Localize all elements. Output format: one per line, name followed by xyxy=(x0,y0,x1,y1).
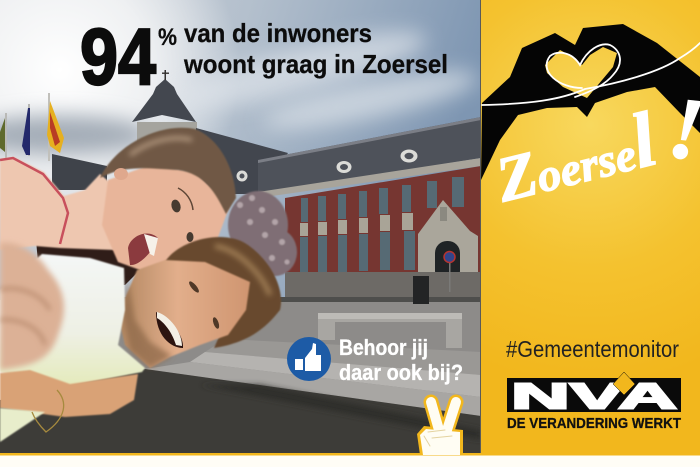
icon: heart-shaped hands xyxy=(481,24,700,180)
bottom white strip xyxy=(0,456,700,467)
photo background: sky xyxy=(0,0,481,300)
logo: N-VA xyxy=(507,372,681,432)
title: statement: woont graag in Zoersel xyxy=(183,49,448,79)
windows xyxy=(300,177,464,272)
script lettering: Zoersel: Zoersel xyxy=(485,95,665,219)
text: call to action: daar ook bij? xyxy=(339,360,463,385)
logo: N-VA: DE VERANDERING WERKT xyxy=(507,415,681,432)
bin xyxy=(413,276,429,304)
hashtag: #Gemeentemonitor xyxy=(506,336,679,362)
title: statement: van de inwoners xyxy=(184,18,372,48)
man: shirt xyxy=(0,254,145,386)
woman: open mouth xyxy=(128,233,158,265)
town hall building xyxy=(52,70,481,298)
woman: hair xyxy=(100,128,236,214)
man: lower shirt xyxy=(0,408,45,442)
bracelet xyxy=(32,390,64,432)
woman: eyes xyxy=(170,188,194,242)
heart line drawing xyxy=(482,43,700,105)
logo: N-VA: NVA xyxy=(511,376,677,416)
woman: dark gap behind xyxy=(36,240,140,285)
icon: thumbs up xyxy=(287,337,331,381)
title: statement xyxy=(183,18,448,79)
man: stubble xyxy=(122,280,172,368)
woman: face xyxy=(102,165,230,270)
blossom tree xyxy=(228,191,297,276)
couple photo xyxy=(0,128,281,442)
title: 94%: % xyxy=(158,24,177,51)
road sign xyxy=(444,252,455,292)
man: arm xyxy=(0,370,138,417)
pavement, steps and asphalt xyxy=(0,252,481,455)
icon: peace hand xyxy=(417,402,463,455)
woman: back and shoulder xyxy=(0,157,140,250)
woman: red strap xyxy=(0,158,68,244)
woman: ear xyxy=(114,168,128,180)
title: 94%: 94 xyxy=(80,12,156,101)
text: call to action: Behoor jij xyxy=(339,335,428,360)
man: face xyxy=(118,260,250,368)
flags xyxy=(0,93,64,161)
text: call to action xyxy=(339,335,463,385)
bottom yellow rule xyxy=(0,453,700,456)
man: laughing mouth xyxy=(156,312,183,348)
joined hands, blurred foreground xyxy=(0,243,64,370)
man: eyes xyxy=(188,280,220,329)
bench xyxy=(318,313,462,348)
man: hair xyxy=(165,237,281,348)
entrance portal xyxy=(418,200,478,298)
panel: yellow sidebar xyxy=(480,0,700,453)
